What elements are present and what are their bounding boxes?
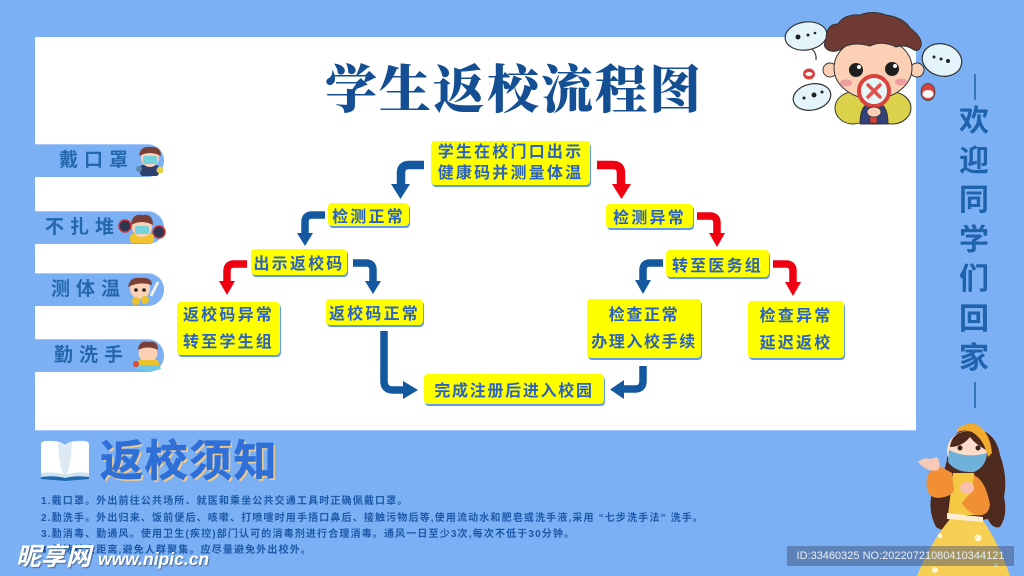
- icon: open book: [41, 440, 89, 481]
- heading: vertical welcome text: 回: [959, 302, 989, 336]
- flow box: show return code: 出示返校码: [253, 256, 344, 273]
- flow box: transfer to medical group: [666, 250, 769, 277]
- arrow: medical to check normal: [635, 263, 663, 294]
- girl eyes: [958, 446, 980, 450]
- line above welcome text: [974, 74, 976, 100]
- flow box: code abnormal: [177, 302, 280, 355]
- watermark: ID bar: [787, 546, 1014, 566]
- flow box: start: 学生在校门口出示: [438, 144, 583, 161]
- icon: small lips left: [803, 68, 815, 80]
- character: girl with mask: [917, 424, 1010, 576]
- tab: wash hands: [35, 340, 164, 372]
- arrow: check normal to finish: [610, 366, 643, 399]
- flow box: code normal: 返校码正常: [329, 306, 420, 323]
- flow box: start: [431, 141, 590, 185]
- arrow: code normal to finish: [384, 331, 418, 399]
- arrow: start to abnormal: [597, 165, 631, 199]
- tab: take temperature: 测体温: [51, 279, 126, 300]
- speech bubble top left: [783, 19, 829, 60]
- character: boy with magnifier: [784, 12, 962, 124]
- note 1: 1.戴口罩。外出前往公共场所、就医和乘坐公共交通工具时正确佩戴口罩。: [41, 496, 408, 507]
- boy eyes: [849, 62, 899, 77]
- girl hair: [930, 427, 1005, 530]
- icon: boy with mask: [136, 146, 164, 176]
- girl raised hand: [918, 457, 940, 471]
- heading: vertical welcome text: 欢: [959, 105, 989, 138]
- heading: vertical welcome text: 迎: [959, 144, 989, 178]
- flow box: check abnormal: 检查异常: [760, 308, 832, 324]
- boy cheeks: [840, 78, 907, 86]
- note 4: 4.保持社交距离,避免人群聚集。应尽量避免外出校外。: [41, 545, 312, 556]
- girl left sleeve: [926, 465, 954, 498]
- title: 学生返校流程图: [325, 63, 703, 120]
- magnifier with X: [859, 76, 889, 123]
- boy ears: [823, 63, 924, 77]
- girl dress: [917, 519, 1010, 576]
- flow box: show return code: [251, 249, 347, 275]
- speech bubble lower left: [791, 80, 833, 114]
- flow box: start: 健康码并测量体温: [438, 165, 583, 182]
- boy hands: [867, 107, 881, 117]
- icon: boy with no-crowd signs: [118, 214, 166, 243]
- note 3: 3.勤消毒、勤通风。使用卫生(疾控)部门认可的消毒剂进行合理消毒。通风一日至少3次,每次不低于30分钟。: [41, 529, 575, 540]
- flow box: normal result: 检测正常: [332, 208, 405, 226]
- speech bubble right: [919, 39, 965, 81]
- boy face: [834, 37, 912, 99]
- girl apron: [948, 473, 980, 515]
- arrow: normal to show code: [297, 215, 325, 246]
- flow box: check normal: 检查正常: [609, 306, 679, 324]
- flow box: finish registration: 完成注册后进入校园: [434, 383, 594, 400]
- flow box: check normal: [587, 299, 701, 358]
- tab: no crowding: 不扎堆: [45, 217, 120, 238]
- flow box: code normal: [326, 299, 423, 325]
- flow box: check abnormal: 延迟返校: [760, 334, 832, 352]
- arrow: start to normal: [391, 165, 424, 199]
- arrow: abnormal to medical: [697, 216, 725, 247]
- girl right sleeve: [962, 475, 990, 515]
- tab: wash hands: 勤洗手: [54, 345, 129, 366]
- watermark: site logo: 昵享网 www.nipic.cn: [16, 543, 209, 571]
- arrow: code to normal: [353, 263, 381, 294]
- girl lower hand: [960, 482, 974, 494]
- tab: wear mask: 戴口罩: [59, 150, 134, 171]
- panel: white background: [35, 37, 916, 430]
- flow box: code abnormal: 返校码异常: [183, 306, 274, 324]
- flow box: abnormal result: [606, 204, 693, 228]
- heading: return notice: 返校须知: [100, 438, 278, 486]
- heading: vertical welcome text: 同: [959, 184, 989, 217]
- arrow: code to abnormal: [219, 264, 247, 295]
- heading: vertical welcome text: 学: [959, 224, 989, 256]
- girl belt: [947, 513, 983, 522]
- girl fringe: [950, 431, 988, 451]
- heading: vertical welcome text: 们: [959, 263, 989, 296]
- boy hair: [824, 12, 921, 51]
- boy body: [835, 92, 911, 124]
- heading: vertical welcome text: 家: [959, 342, 989, 375]
- flow box: normal result: [328, 203, 409, 226]
- tab: take temperature: [35, 274, 164, 306]
- girl face: [947, 431, 987, 471]
- girl dress dots: [932, 534, 998, 573]
- flow box: code abnormal: 转至学生组: [183, 334, 274, 350]
- flow box: transfer to medical group: 转至医务组: [672, 258, 763, 274]
- icon: boy with thermometer: [128, 278, 160, 305]
- line below welcome text: [974, 382, 976, 408]
- notes text block: [41, 495, 704, 556]
- girl headband: [957, 424, 992, 457]
- flow box: finish registration: [424, 374, 604, 404]
- note 2: 2.勤洗手。外出归来、饭前便后、咳嗽、打喷嚏时用手捂口鼻后、接触污物后等,使用流动水和肥皂或洗手液,采用 “七步洗手法” 洗手。: [41, 513, 704, 524]
- arrow: medical to check abnormal: [773, 264, 801, 296]
- flow box: check abnormal: [748, 301, 844, 358]
- icon: lips right: [921, 84, 935, 100]
- girl mask: [948, 450, 987, 472]
- flow box: abnormal result: 检测异常: [613, 210, 686, 227]
- heading: vertical welcome text: [959, 105, 989, 375]
- tab: wear mask: [35, 145, 164, 177]
- tab: no crowding: [35, 212, 164, 244]
- icon: boy washing hands: [133, 342, 161, 371]
- flow box: check normal: 办理入校手续: [591, 334, 697, 350]
- watermark: ID bar: ID:33460325 NO:20220721080410344121: [797, 550, 1004, 562]
